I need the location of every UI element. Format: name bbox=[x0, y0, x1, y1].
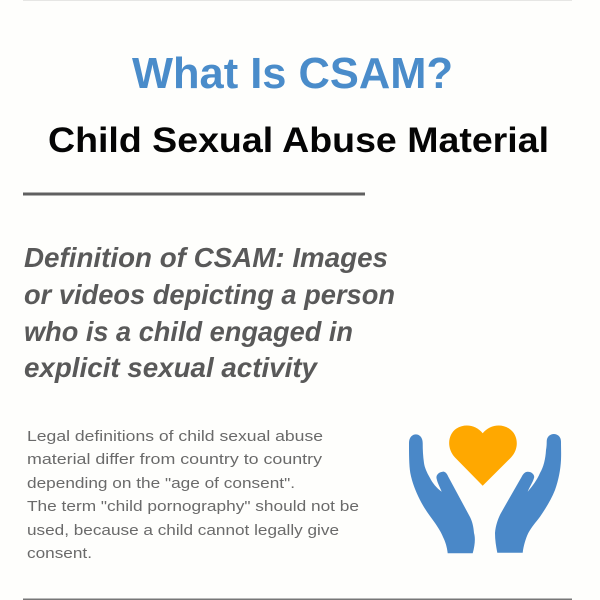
definition text: explicit sexual activity bbox=[24, 352, 318, 383]
definition text: Definition of CSAM: Images bbox=[24, 242, 388, 273]
body text: material differ from country to country bbox=[27, 451, 323, 468]
icon: heart bbox=[449, 426, 517, 486]
body text: depending on the "age of consent". bbox=[27, 475, 295, 492]
body text: The term "child pornography" should not be bbox=[27, 498, 359, 515]
icon: right hand bbox=[495, 434, 561, 553]
body text: Legal definitions of child sexual abuse bbox=[27, 428, 323, 445]
title: What Is CSAM? bbox=[132, 49, 453, 98]
body text: used, because a child cannot legally give bbox=[27, 522, 339, 539]
body text: consent. bbox=[27, 545, 92, 562]
subtitle: Child Sexual Abuse Material bbox=[48, 121, 549, 160]
icon: left hand bbox=[409, 434, 475, 553]
body text bbox=[27, 428, 359, 562]
divider line bbox=[23, 192, 365, 196]
definition text: who is a child engaged in bbox=[24, 316, 353, 347]
definition text bbox=[24, 242, 395, 383]
definition text: or videos depicting a person bbox=[24, 279, 395, 310]
icon: hands holding heart bbox=[409, 426, 561, 553]
